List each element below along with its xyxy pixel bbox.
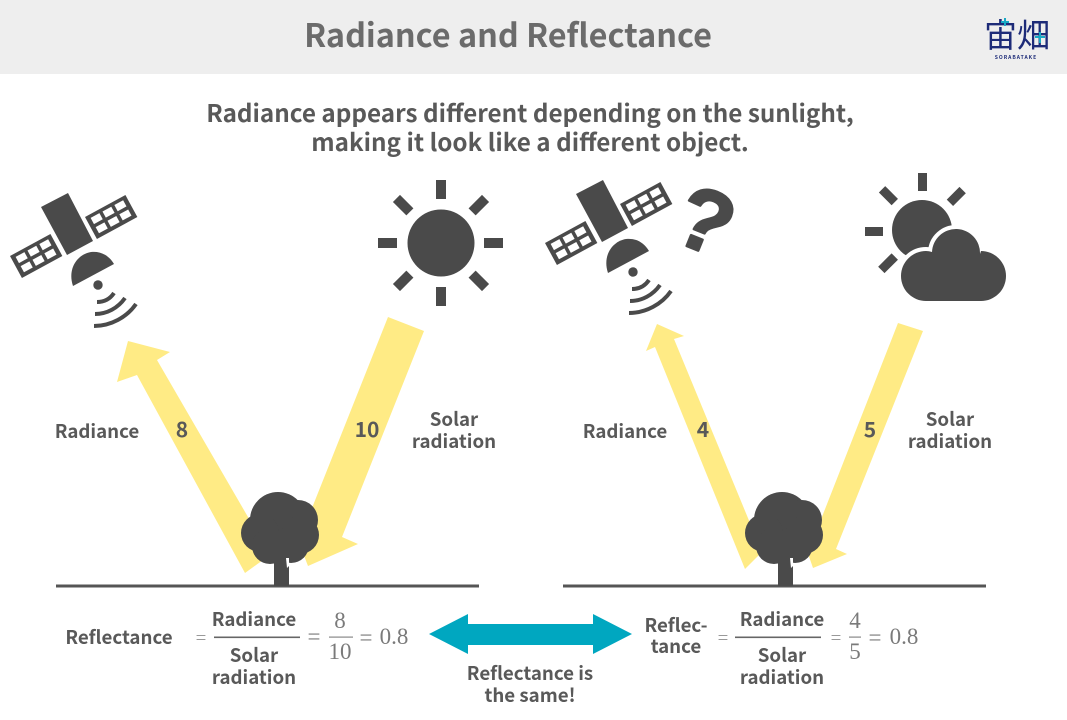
arrow: left solar radiation — [298, 317, 424, 566]
value: left radiance: 8 — [176, 414, 188, 444]
label: left solar radiation: Solar — [430, 405, 479, 432]
formula: right reflectance: Reflec- — [644, 611, 708, 638]
formula: right reflectance: Solar — [758, 641, 807, 668]
formula: right reflectance: 5 — [849, 639, 861, 664]
label: left solar radiation: radiation — [412, 427, 496, 454]
formula: left reflectance: Reflectance — [65, 623, 173, 650]
formula: left reflectance: = — [308, 624, 320, 649]
formula: left reflectance: = — [360, 625, 372, 650]
label: right solar radiation: Solar — [926, 405, 975, 432]
formula: left reflectance: 8 — [334, 608, 346, 633]
subtitle — [206, 94, 854, 158]
caption: reflectance is the same: Reflectance is — [467, 659, 593, 686]
formula: right reflectance: Radiance — [740, 605, 824, 632]
subtitle: making it look like a different object. — [311, 123, 749, 158]
label: left radiance: Radiance — [55, 417, 139, 444]
caption: reflectance is the same: the same! — [484, 681, 576, 708]
ground: left — [56, 584, 479, 588]
formula: left reflectance: 10 — [328, 639, 352, 664]
value: right radiance: 4 — [697, 414, 709, 444]
subtitle: Radiance appears different depending on the sunlight, — [206, 94, 854, 129]
formula: right reflectance: = — [718, 628, 728, 649]
value: right solar radiation: 5 — [864, 414, 876, 444]
double arrow: same reflectance — [429, 614, 632, 654]
arrow: left radiance — [117, 341, 270, 573]
label: right solar radiation — [908, 405, 992, 454]
icon: sun behind cloud — [865, 173, 1006, 301]
formula: right reflectance: = — [831, 628, 841, 649]
title: Radiance and Reflectance — [304, 10, 712, 57]
formula: right reflectance: 4 — [849, 608, 861, 633]
value: left solar radiation: 10 — [355, 414, 379, 444]
label: right solar radiation: radiation — [908, 427, 992, 454]
icon: left satellite — [10, 193, 137, 326]
formula: left reflectance: Solar — [230, 641, 279, 668]
formula: right reflectance: radiation — [740, 663, 824, 690]
formula: right reflectance: 0.8 — [890, 624, 918, 649]
icon: right tree — [745, 492, 823, 586]
logo: Sorabatake: 宙畑 — [984, 9, 1050, 57]
header band — [0, 0, 1067, 74]
label: right radiance: Radiance — [583, 417, 667, 444]
formula: right reflectance — [644, 605, 918, 690]
icon: left tree — [241, 492, 319, 586]
icon: right satellite — [545, 180, 672, 313]
formula: right reflectance: tance — [651, 632, 701, 659]
formula: left reflectance: Radiance — [212, 605, 296, 632]
icon: sun — [378, 180, 503, 306]
arrow: right radiance — [646, 324, 762, 569]
formula: left reflectance — [65, 605, 408, 690]
formula: left reflectance: 0.8 — [380, 624, 408, 649]
icon: question mark: ? — [662, 165, 749, 277]
arrow: right solar radiation — [805, 323, 923, 568]
ground: right — [563, 584, 986, 588]
label: left solar radiation — [412, 405, 496, 454]
logo: Sorabatake: SORABATAKE — [995, 54, 1037, 61]
formula: left reflectance: = — [196, 628, 206, 649]
formula: right reflectance: = — [869, 625, 881, 650]
formula: left reflectance: radiation — [212, 663, 296, 690]
caption: reflectance is the same — [467, 659, 593, 708]
